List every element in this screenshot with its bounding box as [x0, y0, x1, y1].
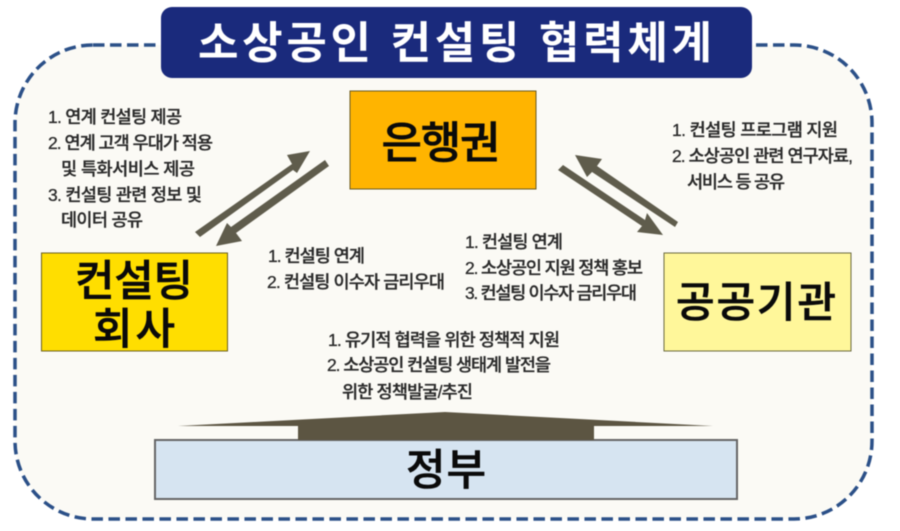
text: bank to consulting firm roles: 2. 컨설팅 이수자 금리우대 — [267, 272, 445, 292]
arrow: consulting firm to banks — [195, 151, 310, 237]
arrow: banks to public institutions — [558, 165, 663, 235]
text: government roles: 2. 소상공인 컨설팅 생태계 발전을 — [327, 355, 551, 375]
box: banks: 은행권 — [382, 119, 500, 168]
text: consulting firm roles: 1. 연계 컨설팅 제공 — [48, 107, 182, 127]
text: consulting firm roles: 데이터 공유 — [61, 210, 143, 230]
text: public institution roles — [672, 120, 853, 192]
box: consulting firms — [42, 253, 228, 354]
arrow: banks to consulting firm — [216, 160, 329, 246]
text: bank to consulting firm roles: 1. 컨설팅 연계 — [268, 246, 365, 266]
text: government roles: 위한 정책발굴/추진 — [342, 382, 473, 402]
box: public institutions — [664, 253, 851, 351]
arrow: government upward pyramid — [178, 412, 713, 440]
arrow: public institutions to banks — [575, 155, 678, 227]
box: public institutions: 공공기관 — [676, 279, 836, 326]
box: consulting firms: 컨설팅 — [75, 258, 193, 306]
text: bank to public institution roles: 1. 컨설팅 연계 — [465, 232, 563, 252]
box: banks — [350, 91, 536, 189]
text: bank to public institution roles — [465, 232, 643, 303]
text: government roles: 1. 유기적 협력을 위한 정책적 지원 — [328, 330, 560, 350]
text: bank to public institution roles: 2. 소상공인 지원 정책 홍보 — [465, 258, 643, 278]
text: bank to public institution roles: 3. 컨설팅 이수자 금리우대 — [465, 283, 637, 303]
text: public institution roles: 1. 컨설팅 프로그램 지원 — [672, 120, 838, 140]
text: consulting firm roles: 2. 연계 고객 우대가 적용 — [48, 133, 213, 153]
title — [161, 7, 752, 78]
box: government: 정부 — [406, 447, 486, 495]
box: government — [155, 440, 737, 499]
text: consulting firm roles: 3. 컨설팅 관련 정보 및 — [48, 185, 202, 205]
text: bank to consulting firm roles — [267, 246, 445, 292]
text: government roles — [327, 330, 560, 402]
title: 소상공인 컨설팅 협력체계 — [198, 19, 712, 68]
text: public institution roles: 2. 소상공인 관련 연구자료, — [672, 146, 853, 166]
box: consulting firms: 회사 — [93, 306, 175, 354]
text: consulting firm roles — [48, 107, 213, 230]
text: consulting firm roles: 및 특화서비스 제공 — [61, 159, 195, 179]
text: public institution roles: 서비스 등 공유 — [687, 172, 785, 192]
